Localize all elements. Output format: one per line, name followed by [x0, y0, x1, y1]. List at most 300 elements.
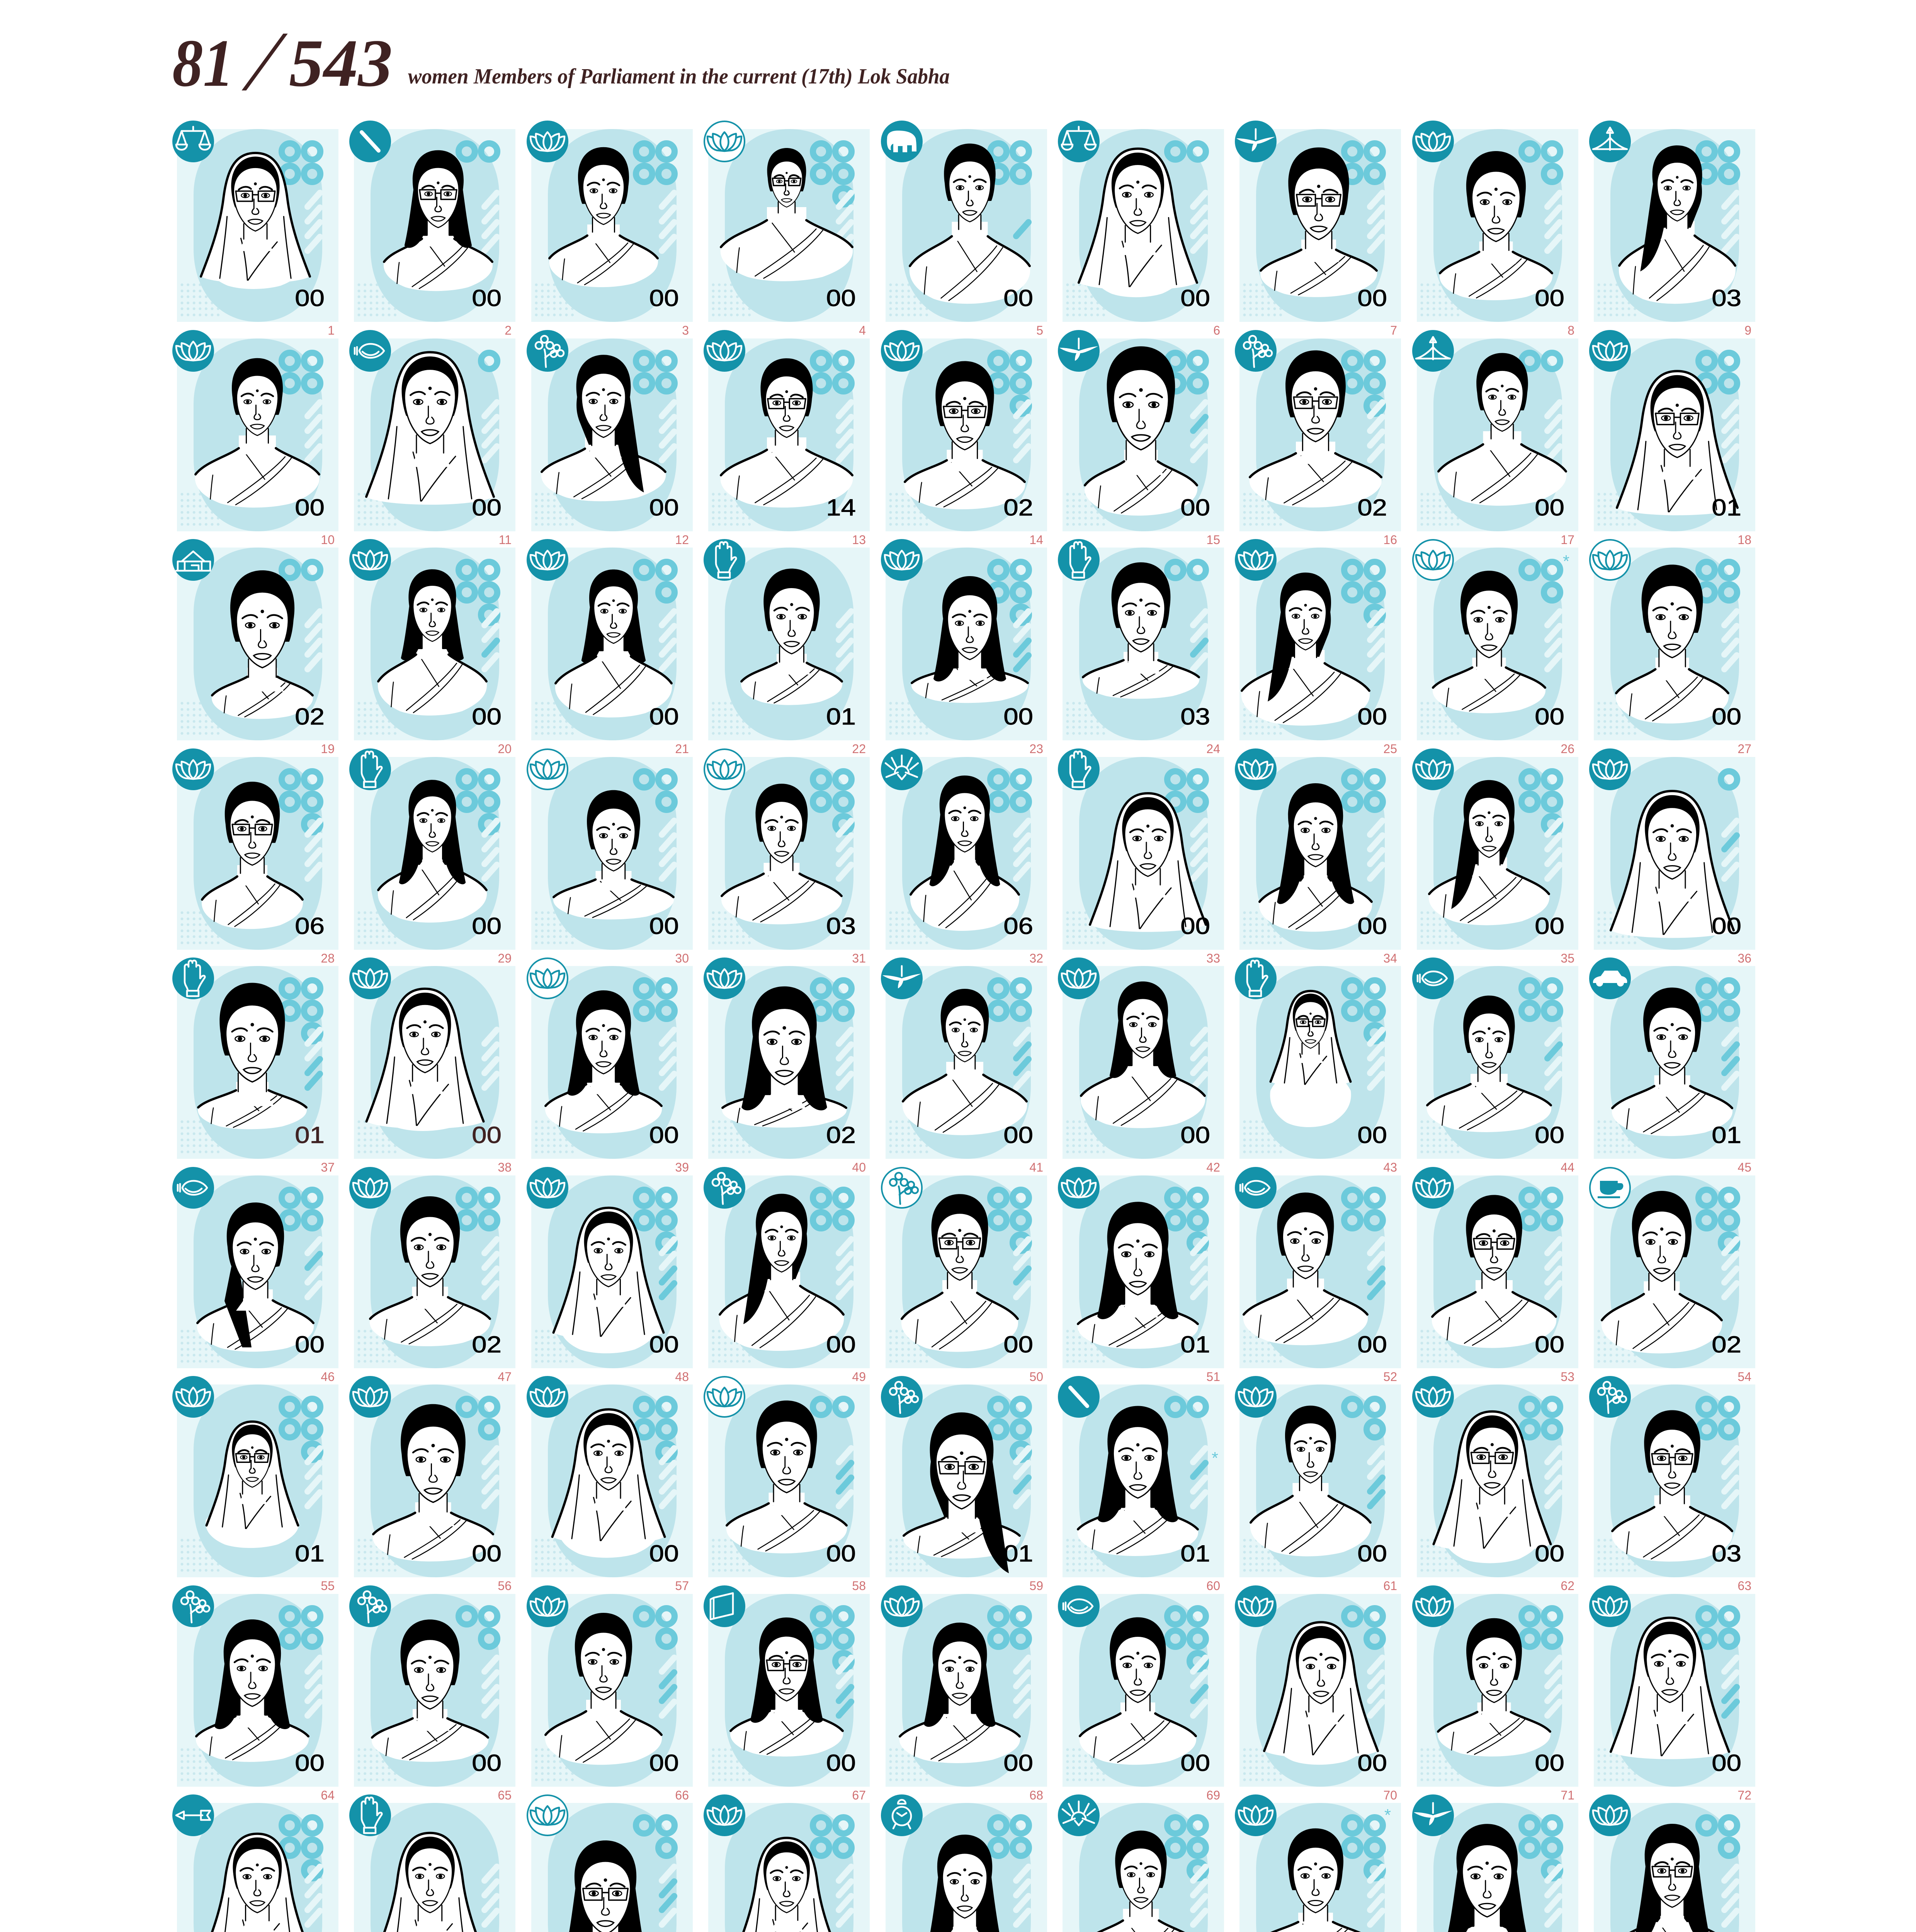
count: 00 — [1180, 1122, 1210, 1148]
serial: 60 — [1206, 1579, 1220, 1593]
icon — [704, 1167, 745, 1209]
portrait — [1617, 371, 1737, 515]
count: 00 — [1535, 1540, 1564, 1566]
card 10 — [172, 330, 338, 547]
card 54 — [1590, 1168, 1755, 1384]
icon — [1589, 121, 1631, 162]
icon — [527, 1376, 568, 1418]
card 32 — [881, 748, 1047, 965]
serial: 27 — [1737, 742, 1751, 756]
card 77 — [881, 1794, 1047, 1932]
icon — [349, 330, 391, 372]
serial: 57 — [675, 1579, 689, 1593]
icon — [349, 957, 391, 999]
count: 00 — [1357, 285, 1387, 311]
card 71 — [1412, 1585, 1578, 1802]
card 78 — [1058, 1794, 1224, 1932]
serial: 67 — [852, 1788, 866, 1802]
card 44 — [1412, 957, 1578, 1174]
serial: 48 — [675, 1370, 689, 1384]
serial: 12 — [675, 533, 689, 547]
icon — [527, 958, 568, 998]
count: 00 — [472, 494, 502, 520]
icon — [172, 539, 214, 581]
count: 00 — [1357, 1122, 1387, 1148]
count: 06 — [1003, 913, 1033, 939]
icon — [1235, 330, 1277, 372]
icon — [1412, 1585, 1454, 1627]
portrait — [1433, 1412, 1551, 1563]
count: 00 — [1180, 1750, 1210, 1776]
count: 03 — [1712, 285, 1741, 311]
card 63 — [1589, 1376, 1755, 1593]
icon — [349, 1376, 391, 1418]
card 35 — [1412, 748, 1578, 965]
card 26 — [1413, 540, 1578, 756]
portrait — [911, 576, 1028, 703]
card 56 — [349, 1376, 515, 1593]
icon — [1412, 957, 1454, 999]
icon — [1058, 957, 1100, 999]
portrait — [553, 790, 674, 919]
icon — [172, 748, 214, 790]
icon — [349, 748, 391, 790]
count: 00 — [472, 285, 502, 311]
portrait — [1432, 1195, 1556, 1348]
portrait — [201, 153, 310, 289]
serial: 17 — [1561, 533, 1574, 547]
portrait — [373, 1404, 493, 1561]
icon — [1235, 539, 1277, 581]
portrait — [904, 361, 1025, 509]
count: 00 — [1535, 1331, 1564, 1357]
card 50 — [882, 1168, 1047, 1384]
portrait — [1433, 571, 1545, 713]
card 57 — [527, 1376, 693, 1593]
icon — [527, 1167, 568, 1209]
icon — [1058, 1167, 1100, 1209]
card 33 — [1058, 748, 1224, 965]
icon — [1589, 957, 1631, 999]
card 69 — [1058, 1585, 1224, 1802]
card 38 — [349, 957, 515, 1174]
serial: 71 — [1561, 1788, 1574, 1802]
serial: 55 — [321, 1579, 335, 1593]
card 13 — [704, 330, 870, 547]
portrait — [366, 352, 494, 505]
card 43 — [1235, 957, 1401, 1174]
serial: 28 — [321, 951, 335, 965]
card 51 — [1058, 1167, 1224, 1384]
card 20 — [349, 539, 515, 756]
serial: 36 — [1737, 951, 1751, 965]
serial: 41 — [1029, 1160, 1043, 1174]
count: 00 — [1535, 1750, 1564, 1776]
icon — [1235, 1585, 1277, 1627]
portrait — [372, 1619, 488, 1762]
count: 01 — [1180, 1331, 1210, 1357]
icon — [1412, 748, 1454, 790]
serial: 62 — [1561, 1579, 1574, 1593]
card 28 — [172, 748, 338, 965]
serial: 1 — [328, 323, 335, 337]
card 4 — [704, 121, 870, 337]
portrait — [1612, 1410, 1732, 1561]
portrait — [721, 784, 842, 924]
card 29 — [349, 748, 515, 965]
count: 01 — [295, 1122, 325, 1148]
icon — [1235, 121, 1277, 162]
card 5 — [881, 121, 1047, 337]
portrait — [726, 1400, 847, 1553]
card 39 — [527, 958, 693, 1174]
serial: 8 — [1567, 323, 1574, 337]
portrait — [721, 148, 853, 281]
portrait — [1619, 145, 1736, 304]
icon — [349, 1167, 391, 1209]
card 17 — [1412, 330, 1578, 547]
card 62 — [1412, 1376, 1578, 1593]
card 45 — [1589, 957, 1755, 1174]
serial: 70 — [1383, 1788, 1397, 1802]
card 58 — [704, 1377, 870, 1593]
card 11 — [349, 330, 515, 547]
serial: 18 — [1737, 533, 1751, 547]
portrait — [1611, 791, 1734, 938]
card 7 — [1235, 121, 1401, 337]
portrait — [374, 1833, 486, 1932]
serial: 72 — [1737, 1788, 1751, 1802]
count: 00 — [649, 913, 679, 939]
serial: 6 — [1213, 323, 1220, 337]
serial: 43 — [1383, 1160, 1397, 1174]
serial: 35 — [1561, 951, 1574, 965]
serial: 7 — [1390, 323, 1397, 337]
card 52 — [1235, 1167, 1401, 1384]
count: 00 — [1003, 1331, 1033, 1357]
portrait — [549, 147, 658, 287]
portrait — [1085, 346, 1197, 515]
card 30 — [527, 749, 693, 965]
card 14 — [881, 330, 1047, 547]
serial: 29 — [498, 951, 512, 965]
serial: 44 — [1561, 1160, 1574, 1174]
icon — [172, 1376, 214, 1418]
portrait — [1241, 573, 1370, 726]
icon — [172, 957, 214, 999]
portrait — [1259, 783, 1372, 932]
count: 00 — [826, 1540, 856, 1566]
count: 00 — [472, 1122, 502, 1148]
count: 00 — [1180, 285, 1210, 311]
card 18 — [1589, 330, 1755, 547]
count: 00 — [1535, 913, 1564, 939]
portrait — [559, 1840, 652, 1932]
icon — [1058, 539, 1100, 581]
card 67 — [704, 1585, 870, 1802]
count: 02 — [1712, 1331, 1741, 1357]
card 74 — [349, 1794, 515, 1932]
icon — [704, 121, 745, 162]
icon — [172, 1167, 214, 1209]
count: 00 — [1535, 703, 1564, 730]
card 6 — [1058, 121, 1224, 337]
icon — [704, 1794, 745, 1836]
portrait — [1090, 793, 1206, 932]
portrait — [366, 989, 484, 1131]
portrait — [910, 776, 1019, 931]
portrait — [195, 358, 320, 508]
portrait — [734, 1838, 839, 1932]
icon — [349, 539, 391, 581]
count: 01 — [1712, 1122, 1741, 1148]
icon — [1589, 330, 1631, 372]
icon — [1235, 1794, 1277, 1836]
icon — [1589, 1794, 1631, 1836]
count: 00 — [1712, 1750, 1741, 1776]
card 24 — [1058, 539, 1224, 756]
count: 00 — [649, 1331, 679, 1357]
portrait — [1433, 1824, 1542, 1932]
serial: 58 — [852, 1579, 866, 1593]
icon — [1413, 540, 1453, 580]
card 23 — [881, 539, 1047, 756]
serial: 42 — [1206, 1160, 1220, 1174]
serial: 63 — [1737, 1579, 1751, 1593]
portrait — [1079, 149, 1197, 297]
card 75 — [527, 1795, 693, 1932]
star marker: * — [1563, 552, 1569, 571]
card 73 — [172, 1794, 338, 1932]
icon — [172, 1585, 214, 1627]
icon — [881, 957, 923, 999]
icon — [704, 1585, 745, 1627]
icon — [1058, 330, 1100, 372]
card 41 — [881, 957, 1047, 1174]
icon — [881, 1794, 923, 1836]
icon — [527, 1585, 568, 1627]
icon — [527, 749, 568, 789]
card 53 — [1412, 1167, 1578, 1384]
serial: 3 — [682, 323, 689, 337]
card 70 — [1235, 1585, 1401, 1802]
count: 00 — [295, 285, 325, 311]
count: 00 — [1357, 1331, 1387, 1357]
card 81 — [1589, 1794, 1755, 1932]
portrait — [1250, 350, 1382, 507]
icon — [704, 1377, 745, 1417]
serial: 32 — [1029, 951, 1043, 965]
icon — [1235, 748, 1277, 790]
serial: 40 — [852, 1160, 866, 1174]
serial: 22 — [852, 742, 866, 756]
icon — [527, 330, 568, 372]
card 55 — [172, 1376, 338, 1593]
count: 03 — [1712, 1540, 1741, 1566]
serial: 16 — [1383, 533, 1397, 547]
serial: 51 — [1206, 1370, 1220, 1384]
count: 00 — [1180, 494, 1210, 520]
serial: 23 — [1029, 742, 1043, 756]
portrait — [1250, 1406, 1371, 1556]
serial: 69 — [1206, 1788, 1220, 1802]
portrait — [553, 1409, 665, 1558]
count: 00 — [1357, 1540, 1387, 1566]
card 16 — [1235, 330, 1401, 547]
serial: 21 — [675, 742, 689, 756]
portrait — [553, 1208, 664, 1353]
serial: 65 — [498, 1788, 512, 1802]
serial: 66 — [675, 1788, 689, 1802]
portrait — [198, 983, 307, 1129]
card 61 — [1235, 1376, 1401, 1593]
serial: 31 — [852, 951, 866, 965]
card 15 — [1058, 330, 1224, 547]
icon — [1412, 1167, 1454, 1209]
portrait — [206, 1422, 299, 1548]
count: 01 — [1003, 1540, 1033, 1566]
icon — [172, 1794, 214, 1836]
count: 06 — [295, 913, 325, 939]
portrait — [545, 990, 662, 1133]
icon — [1589, 1376, 1631, 1418]
star marker: * — [1384, 1806, 1391, 1825]
icon — [172, 330, 214, 372]
portrait — [196, 1619, 309, 1762]
portrait — [730, 1617, 843, 1757]
card 40 — [704, 957, 870, 1174]
icon — [349, 1794, 391, 1836]
serial: 46 — [321, 1370, 335, 1384]
icon — [881, 1585, 923, 1627]
portrait — [378, 569, 487, 716]
card 9 — [1589, 121, 1755, 337]
portrait — [378, 780, 487, 923]
title — [172, 14, 950, 108]
icon — [881, 1376, 923, 1418]
serial: 5 — [1036, 323, 1043, 337]
serial: 52 — [1383, 1370, 1397, 1384]
icon — [704, 957, 745, 999]
count: 00 — [649, 1540, 679, 1566]
serial: 4 — [859, 323, 866, 337]
icon — [527, 539, 568, 581]
count: 02 — [1357, 494, 1387, 520]
portrait — [1257, 1828, 1374, 1932]
serial: 38 — [498, 1160, 512, 1174]
icon — [881, 121, 923, 162]
count: 00 — [472, 703, 502, 730]
card 48 — [527, 1167, 693, 1384]
serial: 2 — [505, 323, 512, 337]
portrait — [1083, 562, 1199, 699]
count: 00 — [826, 1331, 856, 1357]
portrait — [901, 1194, 1018, 1352]
portrait — [370, 1196, 490, 1346]
portrait — [719, 1194, 844, 1351]
card 36 — [1589, 748, 1755, 965]
serial: 54 — [1737, 1370, 1751, 1384]
portrait — [910, 144, 1030, 304]
card 60 — [1058, 1376, 1224, 1593]
icon — [1412, 330, 1454, 372]
serial: 13 — [852, 533, 866, 547]
card 65 — [349, 1585, 515, 1802]
portrait — [908, 1835, 1021, 1932]
count: 00 — [826, 1750, 856, 1776]
icon — [1412, 1376, 1454, 1418]
portrait — [197, 1202, 314, 1352]
icon — [1235, 1167, 1277, 1209]
icon — [1058, 1794, 1100, 1836]
serial: 10 — [321, 533, 335, 547]
count: 00 — [1003, 285, 1033, 311]
card 64 — [172, 1585, 338, 1802]
icon — [881, 748, 923, 790]
serial: 61 — [1383, 1579, 1397, 1593]
count: 00 — [295, 494, 325, 520]
count: 00 — [1535, 494, 1564, 520]
portrait — [1427, 995, 1551, 1132]
count: 00 — [1712, 703, 1741, 730]
card 72 — [1589, 1585, 1755, 1802]
icon — [1235, 957, 1277, 999]
card 8 — [1412, 121, 1578, 337]
portrait — [1612, 1824, 1732, 1932]
count: 00 — [295, 1331, 325, 1357]
card 31 — [704, 749, 870, 965]
serial: 9 — [1744, 323, 1751, 337]
count: 00 — [649, 285, 679, 311]
icon — [1058, 748, 1100, 790]
icon — [1412, 121, 1454, 162]
serial: 53 — [1561, 1370, 1574, 1384]
card 37 — [172, 957, 338, 1174]
card 12 — [527, 330, 693, 547]
serial: 11 — [499, 533, 512, 547]
serial: 26 — [1561, 742, 1574, 756]
portrait — [1601, 1191, 1722, 1354]
portrait — [1438, 1618, 1550, 1757]
card 19 — [172, 539, 338, 756]
icon — [1412, 1794, 1454, 1836]
portrait — [541, 355, 666, 501]
count: 02 — [1003, 494, 1033, 520]
count: 02 — [826, 1122, 856, 1148]
count: 00 — [649, 1122, 679, 1148]
count: 00 — [649, 703, 679, 730]
portrait — [1270, 991, 1351, 1127]
serial: 20 — [498, 742, 512, 756]
icon — [881, 330, 923, 372]
card 27 — [1590, 540, 1755, 756]
title: women Members of Parliament in the current (17th) Lok Sabha — [408, 65, 950, 88]
portrait — [1081, 981, 1205, 1128]
card 79 — [1235, 1794, 1401, 1932]
card 1 — [172, 121, 338, 337]
count: 00 — [1003, 703, 1033, 730]
card 80 — [1412, 1794, 1578, 1932]
card 68 — [881, 1585, 1047, 1802]
title: / — [238, 14, 292, 108]
card 22 — [704, 539, 870, 756]
icon — [527, 121, 568, 162]
portrait — [1438, 353, 1566, 506]
serial: 64 — [321, 1788, 335, 1802]
count: 00 — [472, 1540, 502, 1566]
card 66 — [527, 1585, 693, 1802]
serial: 37 — [321, 1160, 335, 1174]
